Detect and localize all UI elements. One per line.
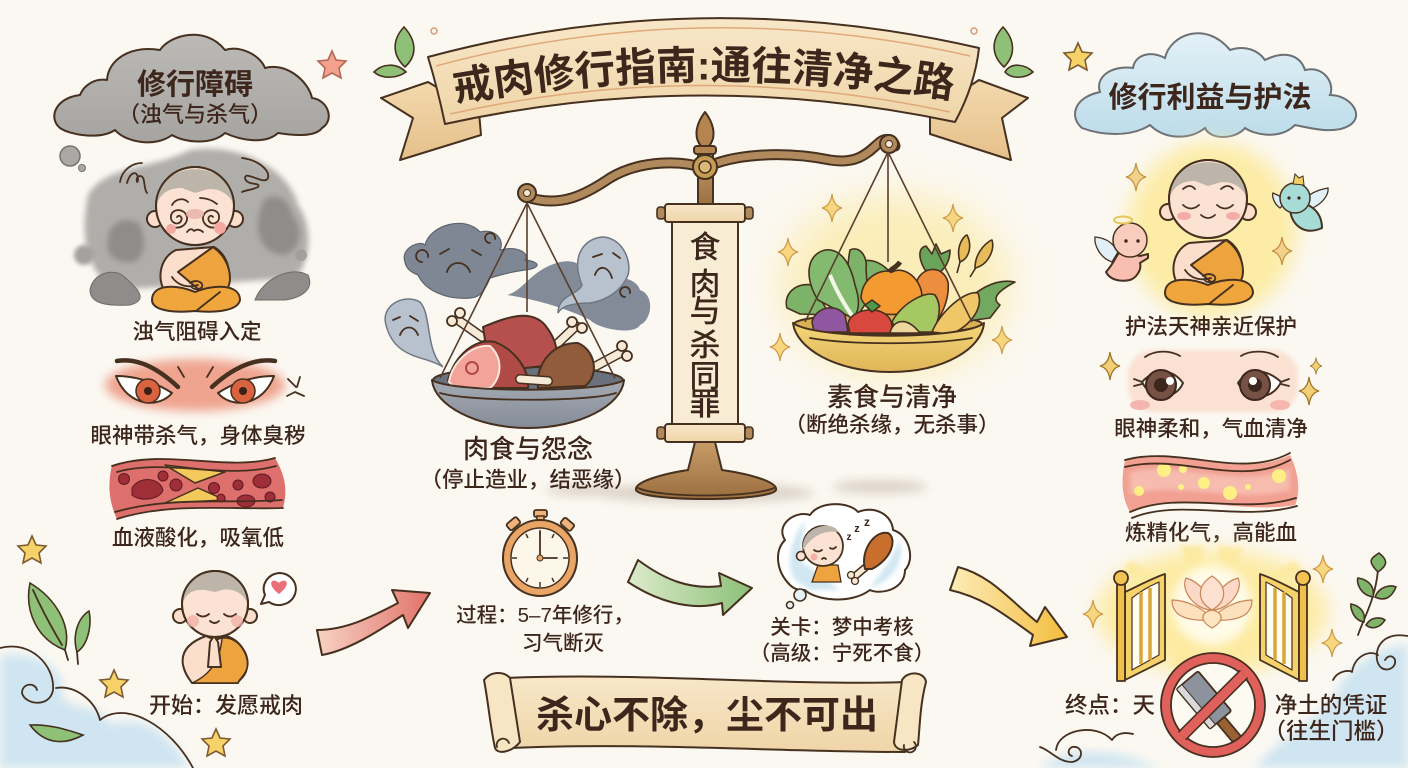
central scroll: 食 xyxy=(690,230,720,265)
caption: 炼精化气，高能血 xyxy=(1125,521,1297,545)
caption: 眼神柔和，气血清净 xyxy=(1114,417,1308,441)
icon: dream cloud with monk and drumstick: z xyxy=(846,532,852,543)
vegetables xyxy=(786,235,1015,334)
bowl back xyxy=(794,314,982,334)
icon: angry eyes xyxy=(105,359,304,411)
arrow: green xyxy=(628,560,752,615)
pan strings xyxy=(440,203,615,378)
scale beam xyxy=(518,135,898,202)
ghosts xyxy=(385,237,629,367)
caption: （高级：宁死不食） xyxy=(750,642,934,665)
icon: dream cloud with monk and drumstick: z xyxy=(854,523,860,535)
title banner xyxy=(380,17,1029,161)
caption: （断绝杀缘，无杀事） xyxy=(784,413,1000,437)
pan strings xyxy=(805,152,972,322)
caption: 净土的凭证 xyxy=(1275,693,1387,718)
icon: glowing artery xyxy=(1123,453,1298,518)
sparkles xyxy=(770,194,1012,361)
caption: 眼神带杀气，身体臭秽 xyxy=(90,424,306,448)
central scroll xyxy=(657,204,753,442)
heading: gray cloud: （浊气与杀气） xyxy=(118,102,272,127)
arrow: yellow xyxy=(950,567,1067,646)
icon: golden gates and lotus xyxy=(1083,546,1342,681)
meats and bones xyxy=(447,308,632,388)
panel: hindrances (left column) xyxy=(54,35,329,718)
caption: 开始：发愿戒肉 xyxy=(149,693,303,718)
caption: 血液酸化，吸氧低 xyxy=(112,526,284,550)
icon: clogged artery xyxy=(109,458,285,519)
central scroll: 与 xyxy=(690,294,720,329)
caption: 素食与清净 xyxy=(827,382,957,412)
icon: gentle eyes xyxy=(1100,350,1322,412)
icon: stopwatch xyxy=(503,510,577,596)
scale post and base xyxy=(636,112,776,499)
icon: no cleaver sign xyxy=(1161,653,1265,757)
central scroll: 同 xyxy=(690,359,720,394)
caption: （往生门槛） xyxy=(1263,719,1399,744)
left pan: meat and resentment xyxy=(385,203,650,492)
icon: dizzy monk in smoke xyxy=(60,146,310,312)
dark resentment clouds xyxy=(404,223,650,330)
caption: 浊气阻碍入定 xyxy=(132,320,262,344)
balance scale xyxy=(385,112,1015,503)
central scroll: 杀 xyxy=(690,328,720,363)
icon: serene monk with guardians xyxy=(1095,142,1328,318)
heading: gray cloud xyxy=(54,35,329,142)
icon: praying monk with heart xyxy=(173,571,296,683)
panel: benefits (right column) xyxy=(1065,33,1399,757)
golden bowl xyxy=(793,323,984,372)
icon: dream cloud with monk and drumstick: z xyxy=(864,515,870,529)
process: timer xyxy=(456,510,634,655)
caption: 肉食与怨念 xyxy=(463,434,593,464)
caption: 关卡：梦中考核 xyxy=(770,616,914,639)
checkpoint: dream xyxy=(750,504,934,665)
title banner: 戒肉修行指南:通往清净之路 xyxy=(452,46,954,104)
bowl back xyxy=(433,367,623,393)
decorative stars and leaves xyxy=(18,27,1092,756)
arrow: pink xyxy=(317,590,430,655)
caption: 终点：天 xyxy=(1065,693,1155,718)
heading: gray cloud: 修行障碍 xyxy=(137,68,253,101)
heading: blue cloud xyxy=(1075,33,1356,137)
caption: 过程：5–7年修行， xyxy=(456,604,634,627)
corner clouds xyxy=(0,635,1408,768)
central scroll: 罪 xyxy=(690,387,720,422)
golden glow xyxy=(780,195,1010,375)
icon: leafy branch xyxy=(1351,553,1396,635)
caption: 习气断灭 xyxy=(522,632,604,655)
caption: （停止造业，结恶缘） xyxy=(420,468,636,492)
central scroll: 肉 xyxy=(690,267,720,302)
heading: blue cloud: 修行利益与护法 xyxy=(1108,81,1312,114)
bottom scroll banner: 杀心不除，尘不可出 xyxy=(536,695,878,737)
scale shadows xyxy=(545,480,928,503)
right pan: vegetables and purity xyxy=(770,152,1015,437)
caption: 护法天神亲近保护 xyxy=(1125,315,1297,339)
icon: dream cloud with monk and drumstick xyxy=(778,504,910,608)
bottom scroll banner xyxy=(484,673,926,752)
metal bowl xyxy=(432,380,624,428)
